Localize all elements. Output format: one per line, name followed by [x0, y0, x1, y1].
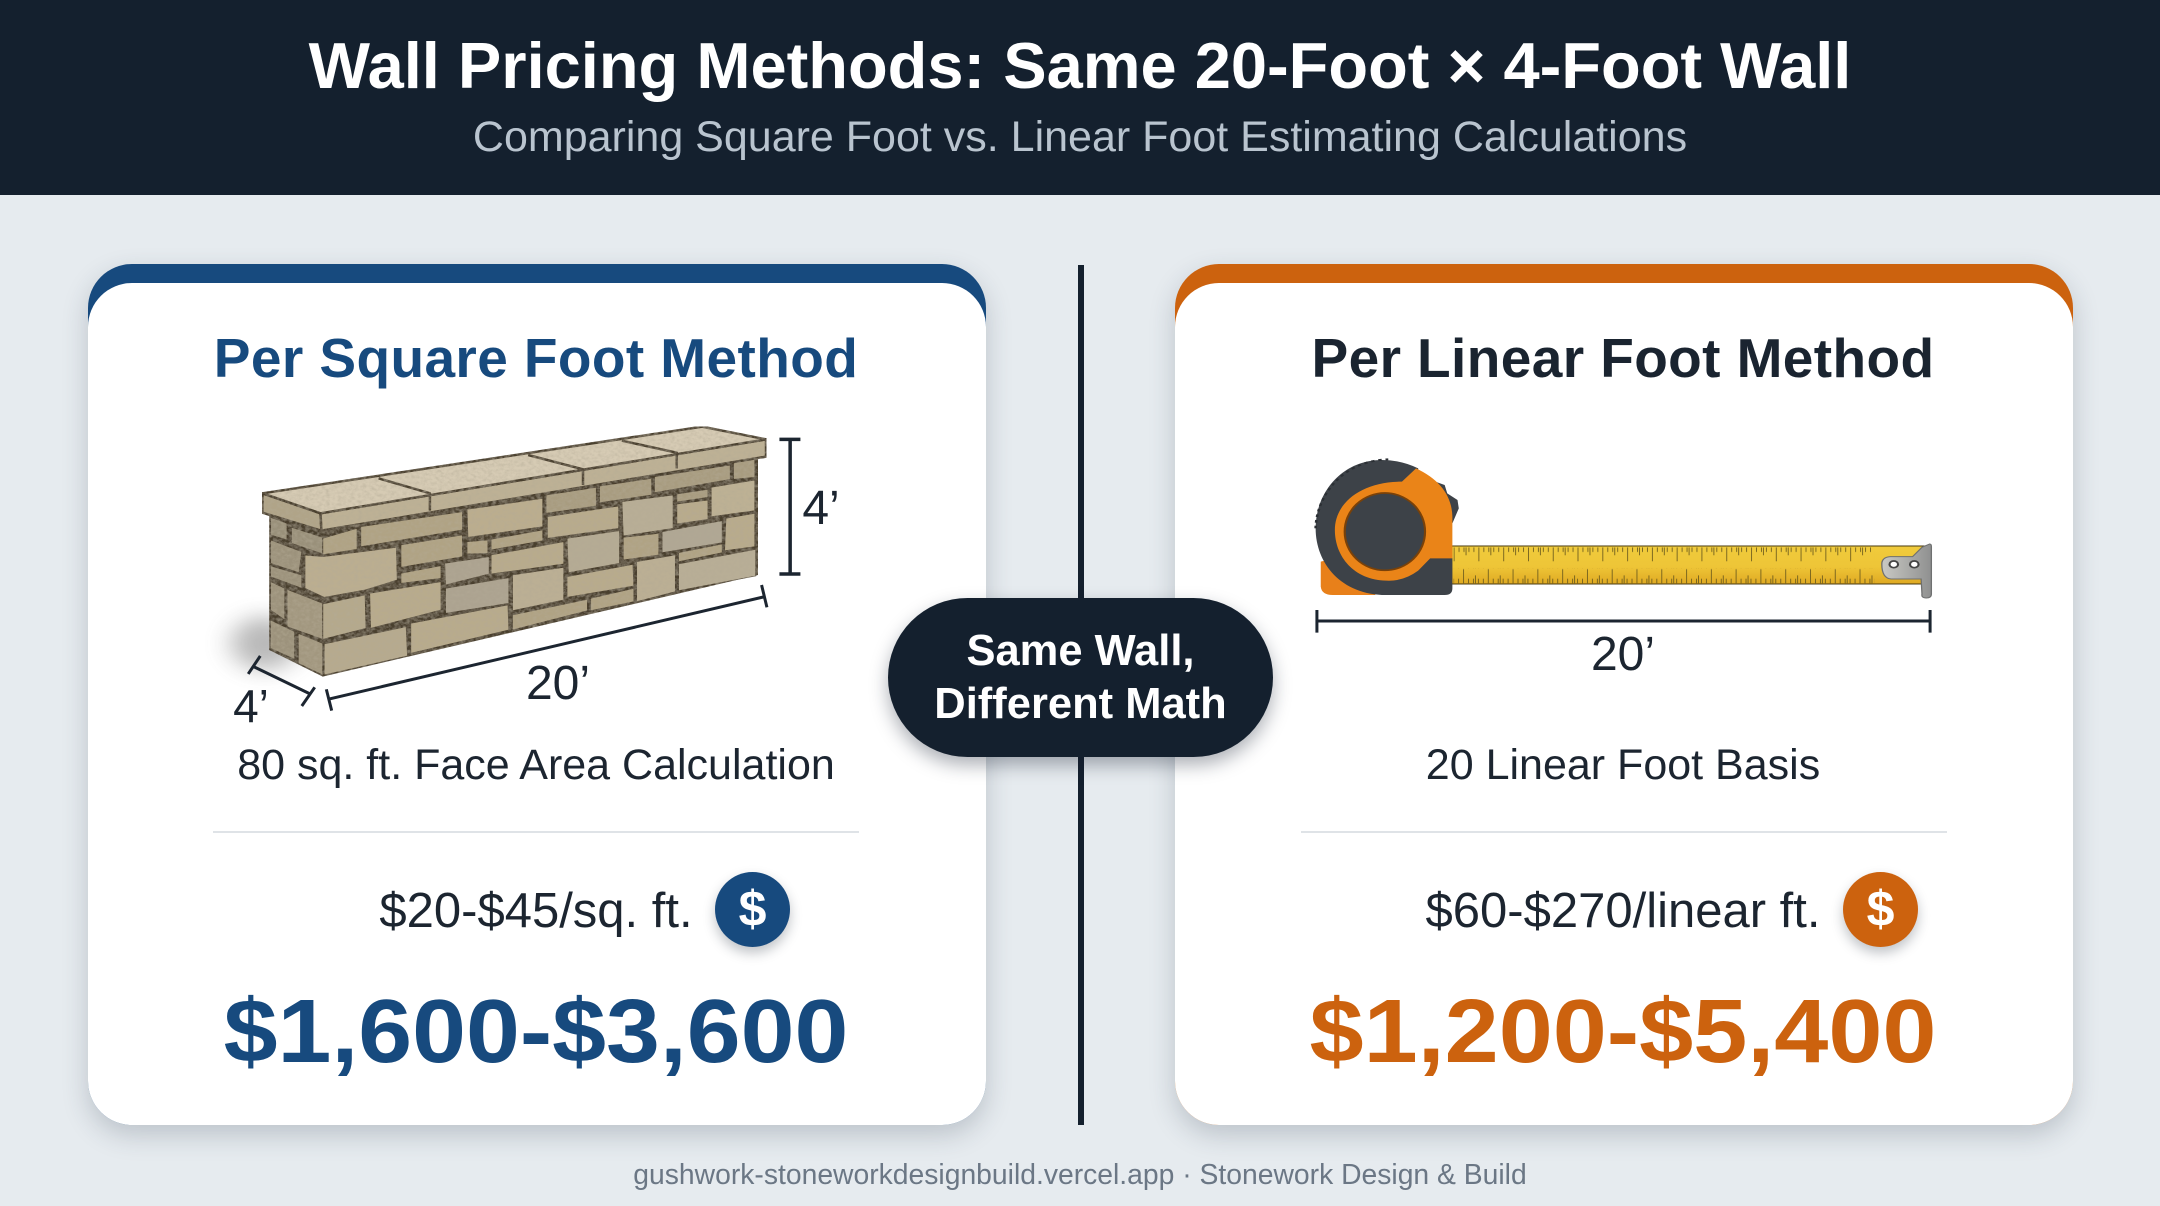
wall shadow — [231, 617, 298, 670]
panel: per linear foot method — [1175, 264, 2073, 1125]
callout pill — [888, 598, 1273, 757]
divider left card — [213, 831, 859, 833]
header band — [0, 0, 2160, 195]
tape length dimension — [1317, 610, 1930, 633]
total price: square foot: $1,600-$3,600 — [224, 982, 848, 1082]
icon: dollar coin blue — [715, 872, 790, 947]
divider right card — [1301, 831, 1947, 833]
wall cap slabs — [262, 427, 766, 531]
center divider line — [1078, 265, 1084, 1125]
dimension label: wall length: 20’ — [526, 657, 590, 710]
tape case — [1316, 459, 1459, 595]
title: Wall Pricing Methods: Same 20-Foot × 4-Foot Wall — [309, 29, 1851, 102]
wall stones — [262, 427, 766, 677]
dimension lines — [248, 439, 800, 711]
dimension label: tape length: 20’ — [1591, 628, 1655, 681]
text: linear foot basis: 20 Linear Foot Basis — [1426, 741, 1820, 789]
subtitle: Comparing Square Foot vs. Linear Foot Estimating Calculations — [473, 113, 1687, 161]
heading: per square foot: Per Square Foot Method — [214, 327, 858, 389]
total price: linear foot: $1,200-$5,400 — [1310, 982, 1936, 1082]
panel: per square foot method — [88, 264, 986, 1125]
dimension label: wall depth: 4’ — [233, 680, 269, 732]
dimension label: wall height: 4’ — [802, 482, 840, 535]
footer source: gushwork-stoneworkdesignbuild.vercel.app · Stonework Design & Build — [633, 1158, 1527, 1190]
tape hook — [1882, 544, 1931, 598]
rate: linear foot: $60-$270/linear ft. — [1426, 884, 1820, 938]
text: square foot basis: 80 sq. ft. Face Area Calculation — [237, 741, 835, 789]
icon: dollar coin blue: $ — [739, 881, 766, 937]
tape blade — [1452, 546, 1926, 584]
icon: dollar coin orange — [1843, 872, 1918, 947]
rate: square foot: $20-$45/sq. ft. — [379, 884, 693, 938]
illustration: tape measure — [1316, 459, 1931, 633]
callout pill: Same Wall, — [966, 626, 1195, 674]
icon: dollar coin orange: $ — [1867, 881, 1894, 937]
callout pill: Different Math — [934, 680, 1227, 728]
heading: per linear foot: Per Linear Foot Method — [1312, 327, 1934, 389]
